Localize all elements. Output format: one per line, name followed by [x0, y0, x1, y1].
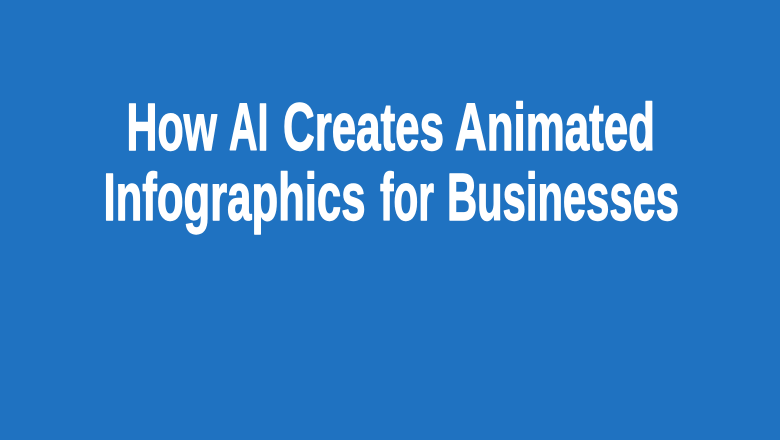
title: Animated — [455, 90, 655, 165]
title: How — [126, 90, 218, 165]
title: AI — [229, 90, 268, 165]
title: Infographics — [104, 160, 366, 235]
title: Creates — [283, 90, 444, 165]
title: for — [380, 160, 434, 235]
